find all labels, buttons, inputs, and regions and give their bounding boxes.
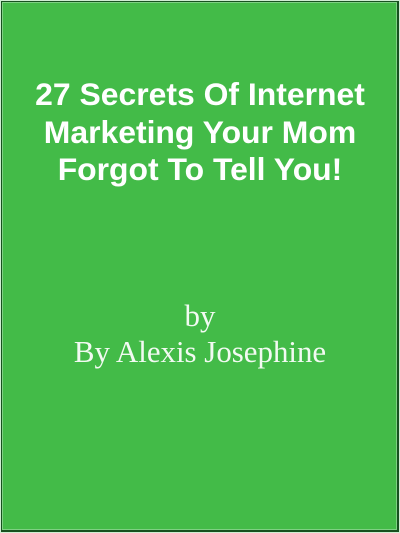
title: Forgot To Tell You! [58, 151, 342, 187]
title: 27 Secrets Of Internet [35, 76, 365, 112]
byline: author name: By Alexis Josephine [74, 334, 326, 369]
title [35, 76, 365, 187]
title: Marketing Your Mom [44, 114, 356, 150]
byline: by: by [185, 298, 215, 333]
